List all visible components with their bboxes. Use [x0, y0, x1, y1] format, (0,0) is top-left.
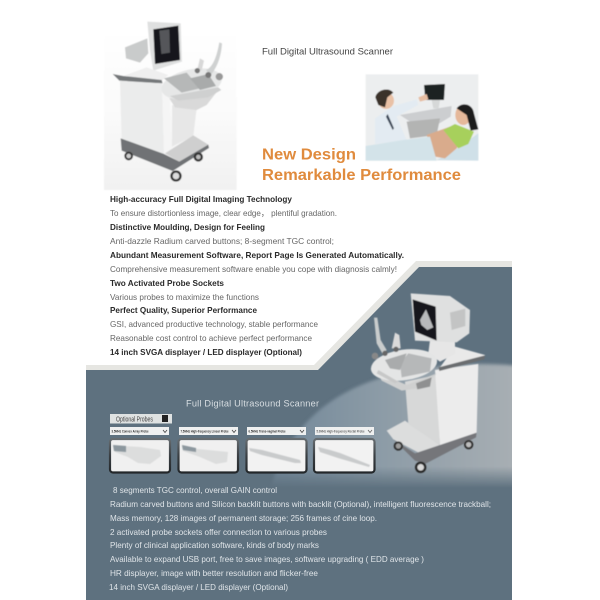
heading: Remarkable Performance: Remarkable Performance [262, 167, 461, 184]
specification list: Plenty of clinical application software, kinds of body marks [110, 540, 319, 550]
feature list: GSI, advanced productive technology, stable performance [110, 319, 318, 329]
specification list: Available to expand USB port, free to save images, software upgrading ( EDD average ) [110, 554, 424, 564]
probe card 3: 6.5MHz Trans-vaginal Probe [248, 430, 286, 434]
feature list: To ensure distortionless image, clear edge， plentiful gradation. [110, 208, 337, 218]
specification list: HR displayer, image with better resolution and flicker-free [110, 568, 318, 578]
feature list: Anti-dazzle Radium carved buttons; 8-segment TGC control; [110, 236, 334, 246]
optional probes label [110, 414, 172, 424]
photo: doctor scanning a patient [366, 74, 478, 161]
title: product name: Full Digital Ultrasound Scanner [262, 46, 393, 56]
specification list [109, 485, 491, 592]
specification list: Mass memory, 128 images of permanent storage; 256 frames of cine loop. [110, 513, 377, 523]
optional probes label: Optional Probes [116, 416, 153, 424]
feature list [110, 194, 404, 357]
scanner product photo on panel [369, 293, 485, 473]
probe card 4: 5.0MHz High-frequency Rectal Probe [316, 430, 364, 434]
feature list: Comprehensive measurement software enable you cope with diagnosis calmly! [110, 264, 397, 274]
specification list: 14 inch SVGA displayer / LED displayer (Optional) [109, 582, 288, 592]
probe card 1 [110, 427, 170, 472]
probe card 2: 7.5MHz High-frequency Linear Probe [180, 430, 229, 434]
probe card 1: 3.5MHz Convex Array Probe [112, 430, 148, 434]
feature list: Reasonable cost control to achieve perfect performance [110, 333, 312, 343]
specification list: 2 activated probe sockets offer connection to various probes [110, 527, 327, 537]
feature list: Abundant Measurement Software, Report Page Is Generated Automatically. [110, 250, 404, 260]
feature list: Perfect Quality, Superior Performance [110, 305, 257, 315]
feature list: 14 inch SVGA displayer / LED displayer (Optional) [110, 347, 302, 357]
panel heading: Full Digital Ultrasound Scanner [186, 398, 319, 408]
feature list: Two Activated Probe Sockets [110, 278, 224, 288]
feature list: Distinctive Moulding, Design for Feeling [110, 222, 265, 232]
probe card 2 [178, 427, 238, 472]
scanner product photo [104, 22, 237, 190]
heading: New Design: New Design [262, 146, 356, 164]
probe card 4 [314, 427, 374, 472]
specification list: Radium carved buttons and Silicon backlit buttons with backlit (Optional), intelligent fluorescence trackball; [110, 499, 491, 509]
probe card 3 [246, 427, 306, 472]
specification list: 8 segments TGC control, overall GAIN control [113, 485, 277, 495]
feature list: Various probes to maximize the functions [110, 292, 259, 302]
panel: blue-grey specification background [86, 261, 520, 600]
feature list: High-accuracy Full Digital Imaging Technology [110, 194, 292, 204]
